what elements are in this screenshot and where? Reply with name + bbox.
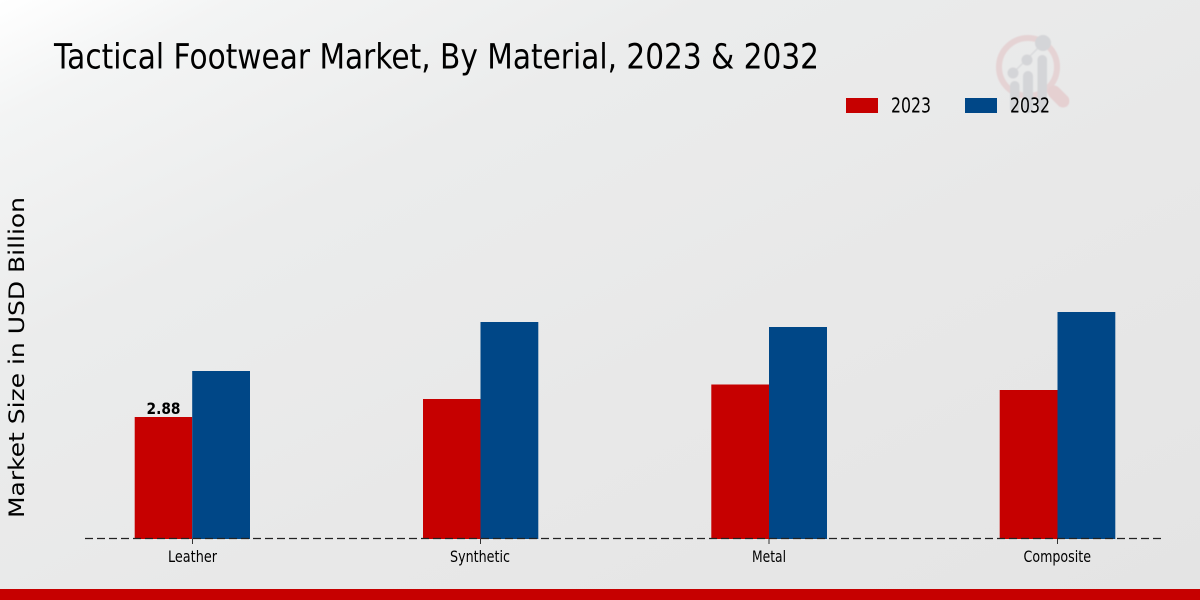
legend	[846, 94, 1050, 118]
group: Leather	[135, 371, 250, 566]
legend item: 2032	[965, 94, 1050, 118]
group: Composite: Composite	[1024, 547, 1091, 566]
legend item: 2023	[846, 94, 931, 118]
watermark logo	[999, 35, 1063, 113]
group: Composite	[1000, 312, 1115, 566]
group: Synthetic	[423, 322, 538, 566]
legend item: 2032: 2032	[1010, 94, 1050, 118]
bar chart	[85, 312, 1165, 566]
legend item: 2023: 2023	[891, 94, 931, 118]
group: Metal	[711, 327, 827, 566]
group: Leather: Leather	[168, 547, 217, 566]
y axis label: Market Size in USD Billion	[5, 197, 30, 518]
group: Metal: Metal	[752, 547, 786, 566]
footer bar	[0, 589, 1200, 600]
group: Leather: 2.88	[146, 399, 180, 418]
title: Tactical Footwear Market, By Material, 2023 & 2032	[53, 38, 819, 78]
group: Synthetic: Synthetic	[450, 547, 510, 566]
